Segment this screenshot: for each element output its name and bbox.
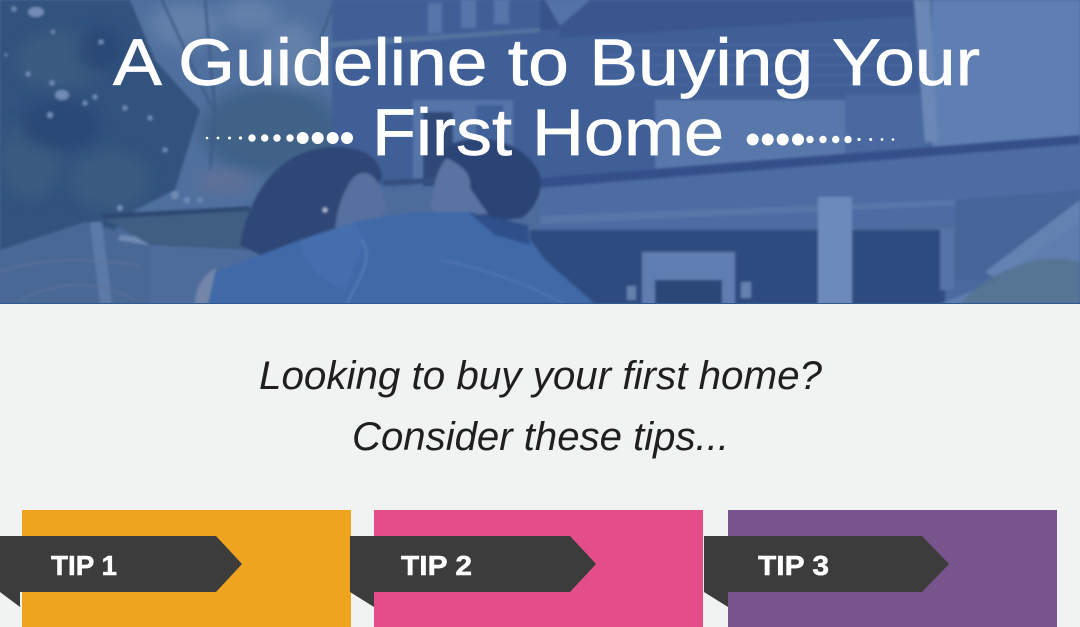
foreground tree — [0, 0, 202, 250]
denim shirt — [195, 212, 595, 304]
lower left garden and siding — [0, 222, 150, 304]
intro text — [259, 354, 823, 459]
background trees — [132, 0, 332, 210]
title — [113, 25, 980, 169]
hero photo: couple in front of house — [0, 0, 1080, 305]
panel: tip 2: TIP 2 — [401, 550, 472, 581]
intro text: Consider these tips... — [352, 415, 729, 459]
title: A Guideline to Buying Your — [113, 25, 980, 99]
sky — [920, 0, 1080, 150]
porch interior, door and column — [530, 197, 954, 305]
man — [430, 139, 541, 225]
intro text: Looking to buy your first home? — [259, 354, 823, 398]
porch roof and fascia — [103, 134, 1080, 251]
woman — [240, 147, 385, 255]
panel: tip 1 — [0, 510, 351, 627]
right dotted ornament — [747, 134, 894, 146]
panel: tip 3 — [704, 510, 1057, 627]
title: First Home — [372, 95, 724, 169]
panel: tip 1: TIP 1 — [51, 550, 117, 581]
panel: tip 3: TIP 3 — [758, 550, 829, 581]
left dotted ornament — [206, 132, 353, 144]
panel: tip 2 — [350, 510, 703, 627]
house siding and windows — [330, 0, 938, 186]
right corner beam and shrubs — [940, 190, 1080, 304]
